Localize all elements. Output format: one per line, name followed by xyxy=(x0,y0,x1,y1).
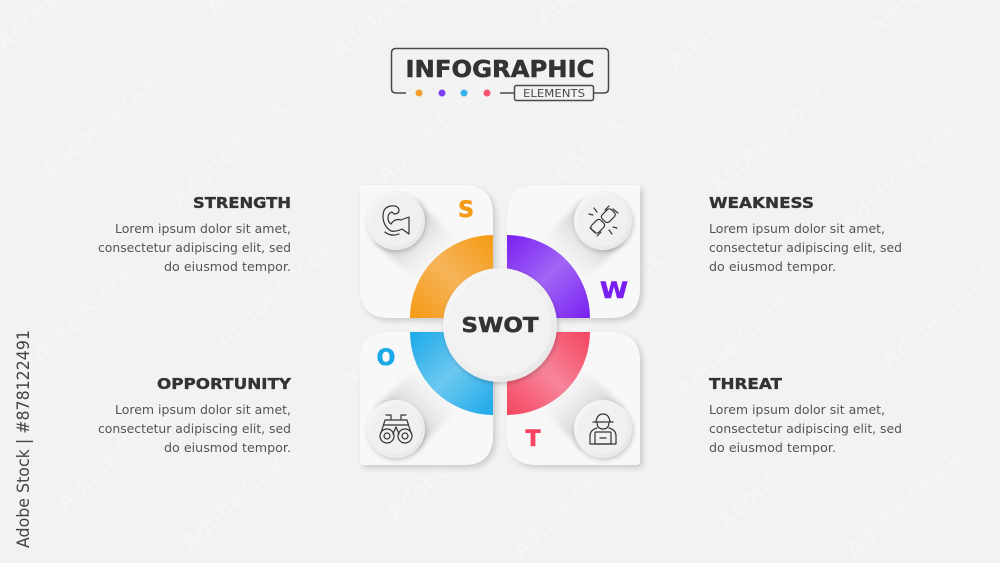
watermark pattern: Adobe Stock xyxy=(501,111,629,229)
icon disc: threat xyxy=(574,400,632,458)
elements tag xyxy=(514,86,594,100)
center label: SWOT xyxy=(462,313,539,337)
icon: hacker with laptop xyxy=(590,414,616,444)
text block: threat: Lorem ipsum dolor sit amet, xyxy=(709,402,885,417)
stock credit: Adobe Stock | #878122491 xyxy=(14,330,34,548)
watermark pattern: Adobe Stock xyxy=(841,446,969,563)
watermark pattern: Adobe Stock xyxy=(371,71,499,189)
watermark pattern: Adobe Stock xyxy=(876,256,1000,374)
text block: strength: STRENGTH xyxy=(193,194,291,212)
letter T: T xyxy=(525,427,541,452)
letter S: S xyxy=(458,198,474,223)
text block: threat xyxy=(709,375,902,455)
arc: threat xyxy=(507,332,590,415)
arc: opportunity xyxy=(410,332,493,415)
watermark pattern: Adobe Stock xyxy=(211,236,339,354)
watermark pattern: Adobe Stock xyxy=(14,261,142,379)
watermark pattern: Adobe Stock xyxy=(711,416,839,534)
text block: strength: Lorem ipsum dolor sit amet, xyxy=(115,221,291,236)
text block: opportunity: OPPORTUNITY xyxy=(157,375,292,393)
text block: weakness: do eiusmod tempor. xyxy=(709,259,836,274)
icon disc: weakness xyxy=(574,192,632,250)
title text: INFOGRAPHIC xyxy=(406,57,594,83)
color dots xyxy=(416,90,490,96)
watermark pattern: Adobe Stock xyxy=(176,438,304,556)
title badge xyxy=(392,48,608,100)
disc shadow: threat xyxy=(546,374,624,450)
watermark pattern: Adobe Stock xyxy=(381,408,509,526)
watermark pattern: Adobe Stock xyxy=(836,118,964,236)
text block: strength: do eiusmod tempor. xyxy=(164,259,291,274)
watermark pattern: Adobe Stock xyxy=(166,94,294,212)
arc: strength xyxy=(410,235,493,318)
text block: weakness xyxy=(709,194,902,274)
elements tag: ELEMENTS xyxy=(523,88,585,100)
disc shadow: strength xyxy=(376,200,453,276)
letter W: W xyxy=(600,279,628,304)
arc: weakness xyxy=(507,235,590,318)
text block: threat: do eiusmod tempor. xyxy=(709,440,836,455)
watermark pattern: Adobe Stock xyxy=(704,81,832,199)
disc shadow: weakness xyxy=(546,200,624,276)
text block: weakness: WEAKNESS xyxy=(709,194,814,212)
text block: threat: consectetur adipiscing elit, sed xyxy=(709,421,902,436)
watermark pattern: Adobe Stock xyxy=(36,66,164,184)
text block: opportunity: consectetur adipiscing elit, sed xyxy=(98,421,291,436)
text block: strength: consectetur adipiscing elit, sed xyxy=(98,240,291,255)
text block: threat: THREAT xyxy=(709,375,783,393)
watermark pattern: Adobe Stock xyxy=(671,286,799,404)
icon disc: strength xyxy=(367,192,425,250)
center circle xyxy=(443,268,557,382)
letter O: O xyxy=(377,346,395,371)
text block: opportunity: do eiusmod tempor. xyxy=(164,440,291,455)
icon: flexed arm xyxy=(383,206,409,235)
panel: strength xyxy=(360,185,493,318)
text block: opportunity: Lorem ipsum dolor sit amet, xyxy=(115,402,291,417)
icon: binoculars xyxy=(380,415,412,443)
disc shadow: opportunity xyxy=(376,374,453,450)
watermark pattern: Adobe Stock xyxy=(541,246,669,364)
watermark pattern: Adobe Stock xyxy=(336,276,464,394)
watermark pattern: Adobe Stock xyxy=(51,398,179,516)
icon disc: opportunity xyxy=(367,400,425,458)
watermark pattern: Adobe Stock xyxy=(506,446,634,563)
panel: threat xyxy=(507,332,640,465)
text block: weakness: Lorem ipsum dolor sit amet, xyxy=(709,221,885,236)
panel: opportunity xyxy=(360,332,493,465)
icon: broken chain xyxy=(589,206,618,236)
text block: weakness: consectetur adipiscing elit, sed xyxy=(709,240,902,255)
panel: weakness xyxy=(507,185,640,318)
text block: opportunity xyxy=(98,375,292,455)
text block: strength xyxy=(98,194,291,274)
